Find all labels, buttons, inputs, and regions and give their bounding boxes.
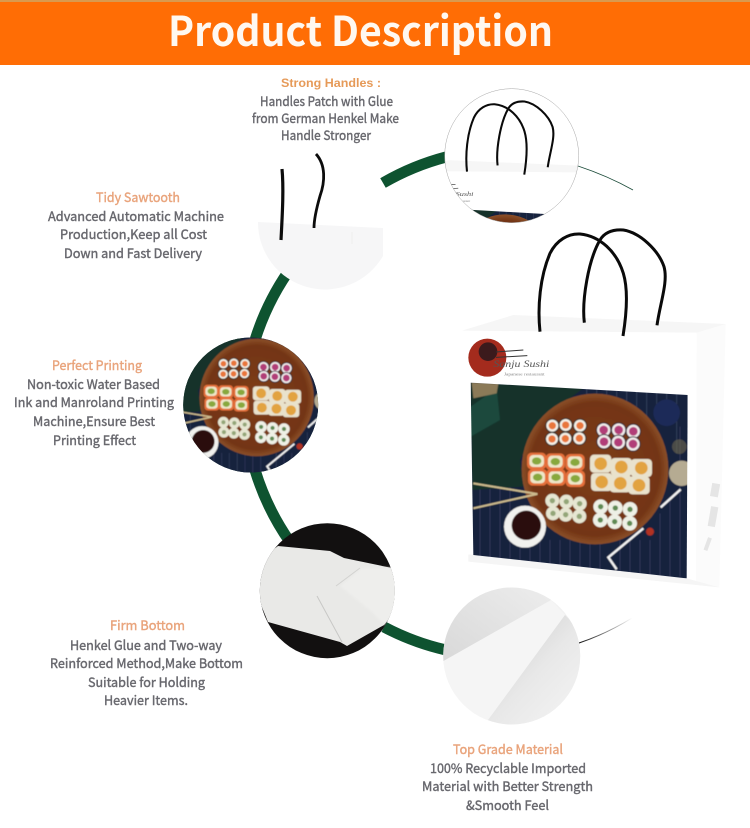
text: strong handles: Handle Stronger <box>281 125 372 144</box>
text: strong handles: Handles Patch with Glue <box>260 91 393 110</box>
text: tidy sawtooth <box>48 187 224 262</box>
text: top grade material: Top Grade Material <box>453 739 563 758</box>
detail circle: strong handles <box>444 88 579 223</box>
text: tidy sawtooth: Down and Fast Delivery <box>64 243 202 262</box>
thin accent line, lower right <box>579 618 632 643</box>
text: tidy sawtooth: Advanced Automatic Machine <box>48 206 224 225</box>
header banner <box>0 0 750 65</box>
text: tidy sawtooth: Tidy Sawtooth <box>96 187 180 206</box>
text: firm bottom: Suitable for Holding <box>88 672 206 691</box>
text: top grade material <box>422 739 593 814</box>
main product photo: shopping bag <box>462 230 726 587</box>
green ring connector <box>255 157 446 650</box>
text: firm bottom: Reinforced Method,Make Bottom <box>50 653 243 672</box>
text: strong handles: Strong Handles : <box>281 76 381 90</box>
text: perfect printing <box>14 355 175 449</box>
text: strong handles: from German Henkel Make <box>252 108 399 127</box>
text: perfect printing: Printing Effect <box>53 430 136 449</box>
text: perfect printing: Perfect Printing <box>52 355 143 374</box>
detail circle: top grade material <box>443 588 580 724</box>
text: top grade material: &Smooth Feel <box>466 795 549 814</box>
text: firm bottom <box>50 615 243 709</box>
text: tidy sawtooth: Production,Keep all Cost <box>60 224 207 243</box>
thin accent line, upper right <box>578 166 633 190</box>
text: top grade material: 100% Recyclable Imported <box>430 758 586 777</box>
text: top grade material: Material with Better Strength <box>422 776 593 795</box>
detail circle: tidy sawtooth <box>258 154 383 289</box>
text: firm bottom: Henkel Glue and Two-way <box>70 635 222 654</box>
text: perfect printing: Non-toxic Water Based <box>27 374 160 393</box>
text: perfect printing: Machine,Ensure Best <box>33 411 155 430</box>
text: perfect printing: Ink and Manroland Printing <box>14 392 175 411</box>
detail circle: firm bottom <box>260 523 395 658</box>
text: firm bottom: Heavier Items. <box>104 690 188 709</box>
text: strong handles <box>252 76 399 144</box>
detail circle: perfect printing <box>183 338 318 472</box>
text: firm bottom: Firm Bottom <box>110 615 185 634</box>
